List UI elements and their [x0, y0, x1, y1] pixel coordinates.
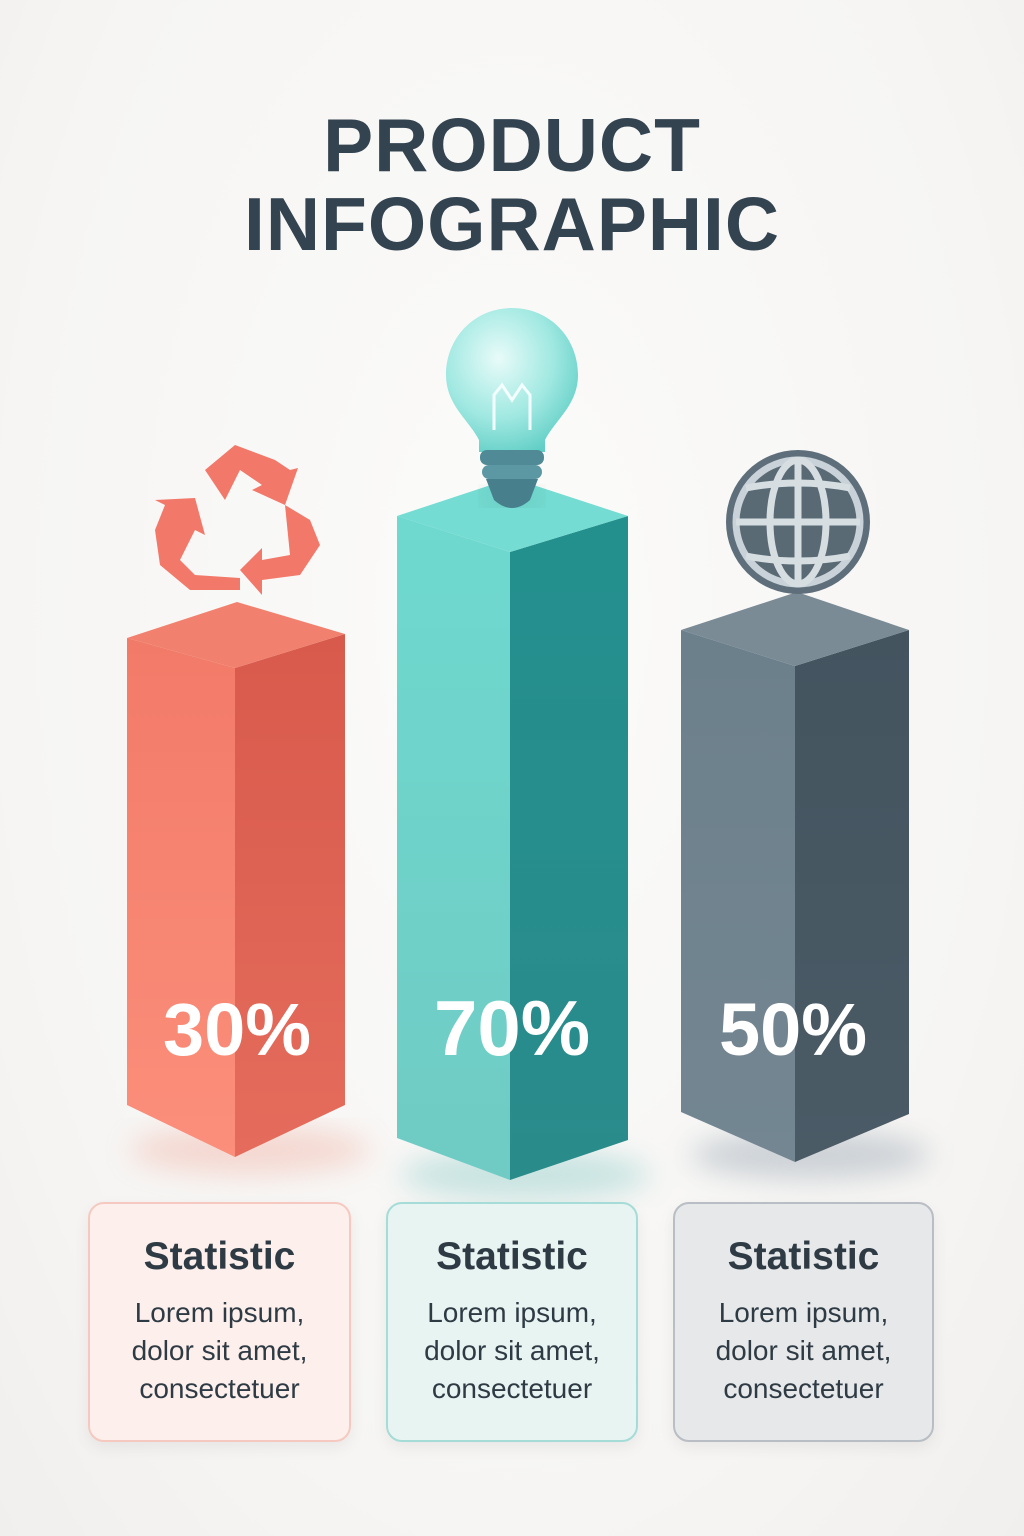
icon: light bulb [446, 308, 578, 508]
card: teal [386, 1202, 638, 1442]
card text: dolor sit amet, [716, 1335, 891, 1366]
bar: coral 30%: 30% [163, 988, 311, 1071]
title: PRODUCT [323, 103, 701, 187]
bar: coral 30% [127, 602, 345, 1157]
card text: Lorem ipsum, [135, 1297, 304, 1328]
card: coral [88, 1202, 351, 1442]
card: gray [673, 1202, 934, 1442]
card text: consectetuer [723, 1373, 884, 1404]
bar: gray 50%: 50% [719, 988, 867, 1071]
bar: teal 70% [397, 478, 628, 1180]
bar: teal 70%: 70% [434, 984, 590, 1072]
bar: gray 50% [681, 592, 909, 1162]
title [244, 103, 780, 266]
card text: dolor sit amet, [132, 1335, 307, 1366]
card title: Statistic [144, 1235, 295, 1278]
card text [424, 1297, 600, 1404]
title: INFOGRAPHIC [244, 182, 780, 266]
bar shadows [130, 1125, 930, 1200]
card title: Statistic [436, 1235, 588, 1278]
card text [716, 1297, 891, 1404]
card text [132, 1297, 307, 1404]
card title: Statistic [728, 1235, 879, 1278]
card text: Lorem ipsum, [427, 1297, 597, 1328]
card text: consectetuer [139, 1373, 300, 1404]
icon: recycle [155, 445, 320, 595]
icon: globe [726, 450, 870, 594]
card text: consectetuer [432, 1373, 592, 1404]
card text: dolor sit amet, [424, 1335, 600, 1366]
card text: Lorem ipsum, [719, 1297, 888, 1328]
